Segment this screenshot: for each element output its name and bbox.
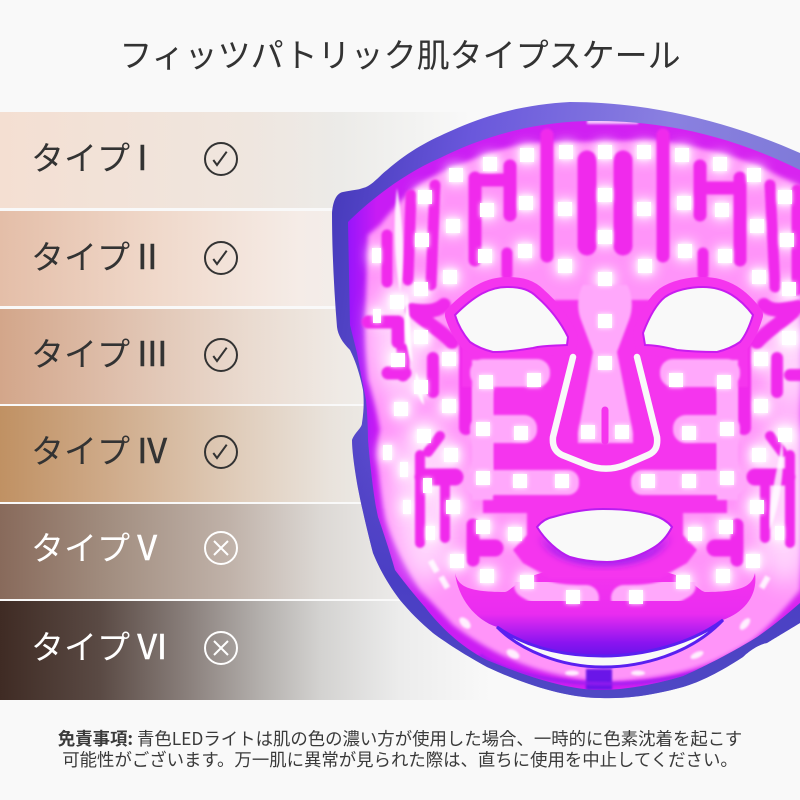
row: type V: [0, 504, 800, 599]
label: type V: タイプ V: [31, 521, 157, 570]
disclaimer text: 可能性がございます。万一肌に異常が見られた際は、直ちに使用を中止してください。: [62, 747, 738, 772]
LED wide glow: [372, 145, 796, 604]
nose outline: [553, 357, 657, 469]
lower chin band: [479, 654, 698, 690]
chin LED bars: [428, 559, 771, 676]
icon: check: [204, 241, 238, 275]
side white glow: [372, 280, 800, 585]
label: type VI: タイプ VI: [31, 620, 167, 669]
LED face mask: [332, 102, 800, 698]
label: type III: タイプ III: [31, 327, 167, 376]
row: type III: [0, 309, 800, 404]
icon: check: [204, 435, 238, 469]
gloss streaks: [395, 119, 783, 530]
icon: cross: [204, 531, 238, 565]
under-mouth shadow: [540, 535, 670, 565]
icon: check: [204, 338, 238, 372]
label: type II: タイプ II: [31, 230, 157, 279]
title: フィッツパトリック肌タイプスケール: [119, 29, 681, 77]
icon: cross: [204, 631, 238, 665]
label: type IV: タイプ IV: [31, 424, 167, 473]
label: type I: タイプ I: [31, 131, 147, 180]
right eye opening: [643, 287, 753, 352]
chin gap: [497, 620, 723, 667]
nose groove: [602, 410, 608, 441]
icon: check: [204, 142, 238, 176]
LED squares: [372, 145, 796, 604]
left eye opening: [455, 287, 568, 352]
mask rim: [332, 102, 800, 698]
mask glowing face: [330, 100, 800, 700]
disclaimer text: [58, 726, 742, 772]
mouth opening: [537, 509, 672, 562]
row: type II: [0, 211, 800, 306]
disclaimer text: 免責事項: 青色LEDライトは肌の色の濃い方が使用した場合、一時的に色素沈着を起こす: [58, 726, 742, 751]
chin panels: [527, 585, 683, 598]
light panel zone: [365, 140, 800, 682]
row: type IV: [0, 406, 800, 502]
central face block: [462, 300, 748, 578]
forehead and cheek grooves: [368, 135, 800, 560]
LED near glow: [372, 145, 796, 604]
light panels: [465, 285, 745, 500]
row: type I: [0, 112, 800, 208]
chin crescent: [455, 572, 756, 654]
eye surrounds: [455, 287, 753, 352]
row: type VI: [0, 601, 800, 700]
